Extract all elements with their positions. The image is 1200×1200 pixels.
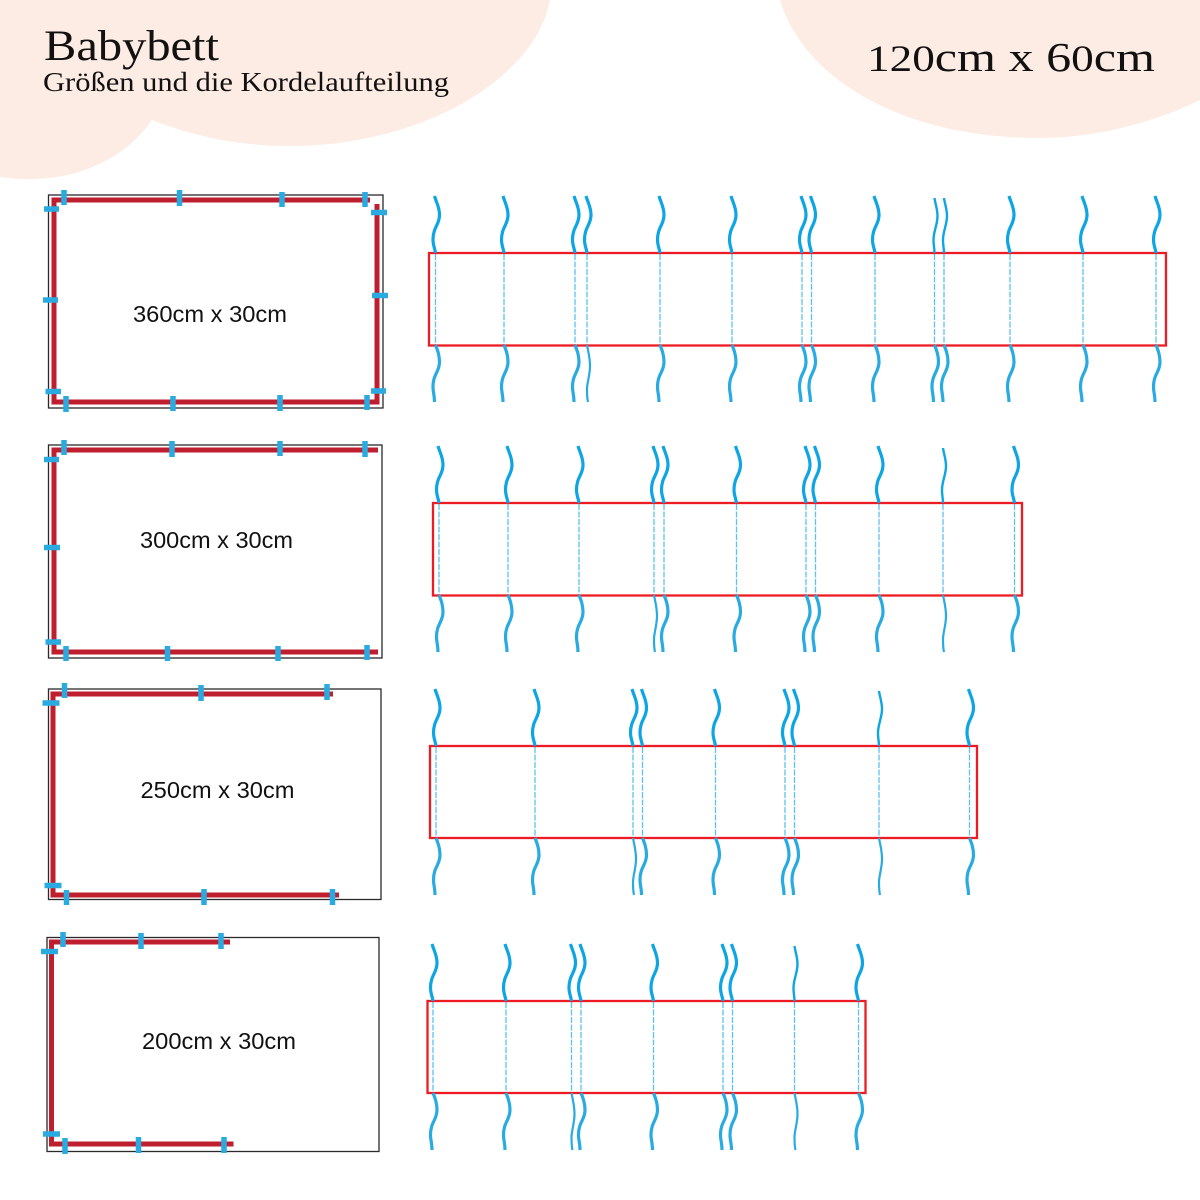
panel: 360cm cord distribution bbox=[429, 196, 1166, 402]
cushion rectangle bbox=[429, 253, 1166, 346]
size label: 360cm x 30cm bbox=[133, 301, 287, 327]
panel: 300cm bumper layout bbox=[44, 440, 382, 661]
dashed fold lines bbox=[433, 1002, 858, 1093]
bumper strip bbox=[52, 942, 234, 1144]
mattress size heading: 120 cm x 6 0cm bbox=[867, 34, 1155, 80]
cushion rectangle bbox=[433, 503, 1022, 596]
dashed fold lines bbox=[439, 504, 1014, 595]
ties bbox=[41, 932, 224, 1154]
bumper strip bbox=[54, 200, 377, 402]
ties bbox=[44, 440, 367, 661]
ties bbox=[43, 190, 388, 412]
panel: 200cm bumper layout bbox=[41, 932, 379, 1154]
panel: 200cm cord distribution bbox=[428, 944, 866, 1150]
size label: 200cm x 30cm bbox=[142, 1028, 296, 1054]
lower cords bbox=[430, 1093, 862, 1150]
lower cords bbox=[433, 345, 1160, 402]
ties bbox=[42, 683, 332, 905]
dashed fold lines bbox=[436, 747, 970, 838]
title: Babybett bbox=[44, 23, 219, 70]
upper cords bbox=[430, 944, 862, 1001]
lower cords bbox=[434, 838, 974, 895]
upper cords bbox=[433, 196, 1160, 253]
subtitle: Größen und die Kordelaufteilung bbox=[43, 67, 449, 97]
size label: 250cm x 30cm bbox=[140, 777, 294, 803]
lower cords bbox=[436, 595, 1018, 652]
upper cords bbox=[436, 446, 1018, 503]
upper cords bbox=[434, 689, 974, 746]
cushion rectangle bbox=[428, 1001, 866, 1093]
panel: 360cm bumper layout bbox=[43, 190, 388, 412]
cloud: header right bbox=[780, 0, 1200, 138]
bumper strip bbox=[53, 694, 339, 895]
panel: 250cm bumper layout bbox=[42, 683, 381, 905]
panel: 250cm cord distribution bbox=[430, 689, 977, 895]
panel: 300cm cord distribution bbox=[433, 446, 1022, 652]
bumper strip bbox=[54, 450, 378, 652]
size label: 300cm x 30cm bbox=[140, 527, 293, 553]
cloud: header left bbox=[0, 0, 550, 179]
cushion rectangle bbox=[430, 746, 977, 838]
dashed fold lines bbox=[436, 254, 1156, 345]
